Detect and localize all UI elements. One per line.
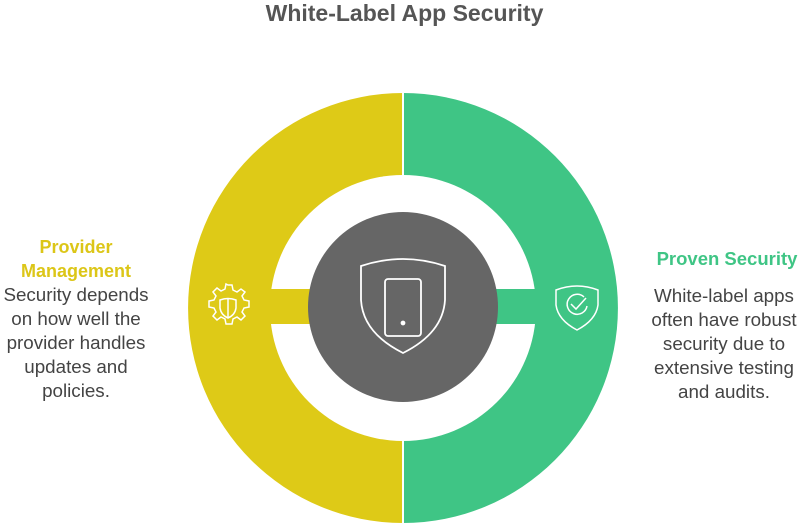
body: provider management: [3, 284, 149, 401]
body: proven security: White-label apps: [654, 285, 794, 306]
text: proven security: [651, 248, 798, 402]
heading: provider management: [21, 237, 131, 281]
text: provider management: [3, 237, 149, 401]
body: proven security: extensive testing: [654, 357, 794, 378]
body: proven security: often have robust: [651, 309, 797, 330]
body: provider management: provider handles: [7, 332, 145, 353]
panel: provider management half ring: [188, 93, 403, 523]
panel: proven security half ring: [403, 93, 618, 523]
body: provider management: on how well the: [11, 308, 141, 329]
icon: shield check: [556, 286, 598, 330]
connector: left bar: [270, 289, 330, 324]
body: proven security: [651, 285, 797, 402]
connector: right bar: [476, 289, 536, 324]
title: White-Label App Security: [266, 0, 543, 26]
heading: proven security: Proven Security: [657, 248, 797, 269]
center circle: [308, 212, 498, 402]
body: proven security: and audits.: [678, 381, 770, 402]
body: provider management: Security depends: [3, 284, 149, 305]
icon: gear shield: [209, 284, 249, 324]
body: provider management: updates and: [24, 356, 128, 377]
body: provider management: policies.: [42, 380, 110, 401]
icon: shield with phone: [361, 259, 445, 353]
heading: provider management: Provider: [39, 237, 113, 257]
body: proven security: security due to: [663, 333, 785, 354]
heading: provider management: Management: [21, 261, 131, 281]
